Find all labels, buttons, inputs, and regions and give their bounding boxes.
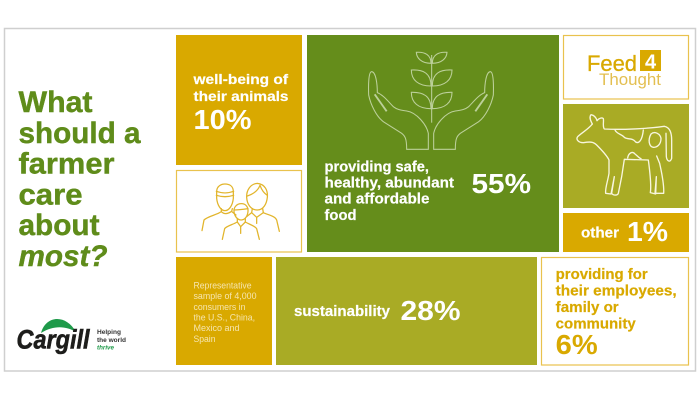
panel: safe food: food [324,208,356,224]
logo: Cargill: Helping [97,329,121,336]
logo: Cargill: Cargill [16,324,90,354]
panel: Feed4Thought logo: 4 [645,52,657,74]
panel: Feed4Thought logo: Thought [599,71,661,89]
panel: representative sample note: Spain [194,333,216,344]
panel: other [563,213,689,252]
panel: other: other [581,225,619,242]
panel: well-being of animals [176,35,302,165]
title: most? [18,240,108,273]
title: about [18,209,100,242]
title: care [18,178,82,212]
panel: safe food: 55% [472,168,531,199]
panel: safe food: and affordable [324,192,430,208]
panel: Feed4Thought logo: Feed [587,51,637,76]
title: should a [18,117,141,150]
panel: safe food: providing safe, [324,160,429,176]
title: What [18,86,92,119]
title: farmer [18,148,115,180]
panel: safe food: healthy, abundant [324,175,454,191]
panel: employees, family or community: community [556,316,636,332]
icon: hands holding plant [369,52,493,149]
panel: employees, family or community: family or [556,300,619,316]
icon: family [202,183,279,239]
panel: representative sample note [176,257,272,365]
panel: employees, family or community: providing for [556,267,648,283]
panel: other: 1% [627,216,668,247]
panel: sustainability [276,257,537,365]
panel: well-being of animals: 10% [194,104,252,135]
panel: safe food [307,35,559,252]
panel: employees, family or community: 6% [556,329,598,360]
panel: representative sample note: the U.S., China, [194,312,255,322]
panel: representative sample note: Mexico and [194,322,240,333]
panel: Feed4Thought logo [564,36,688,99]
panel: representative sample note: Representative [194,280,252,291]
panel: well-being of animals: well-being of [192,71,288,87]
panel: employees, family or community: their employees, [556,284,677,300]
title [18,86,141,273]
logo: Cargill [16,319,126,354]
panel: representative sample note: sample of 4,000 [194,290,256,301]
panel: representative sample note: consumers in [194,301,246,312]
logo: Cargill: the world [97,337,126,344]
panel: well-being of animals: their animals [194,88,289,104]
icon: cow [577,115,672,195]
panel: employees, family or community [542,258,688,365]
panel: sustainability: 28% [400,295,461,326]
panel: family icon [176,170,302,252]
panel: sustainability: sustainability [294,303,391,320]
logo: Cargill: thrive [97,344,114,352]
panel: cow icon [563,104,689,208]
